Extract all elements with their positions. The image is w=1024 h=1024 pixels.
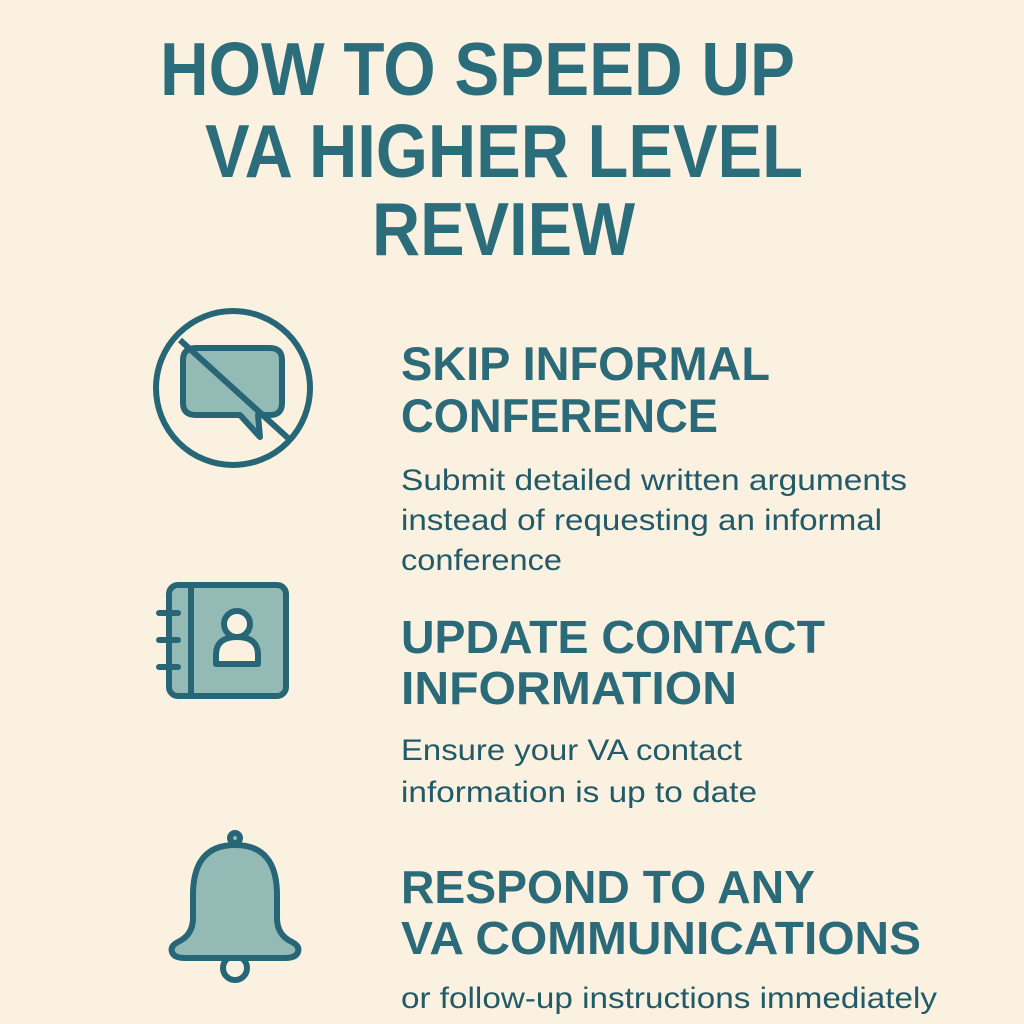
- icon: bell: [172, 833, 298, 980]
- heading: update contact information: INFORMATION: [401, 662, 737, 714]
- text: skip informal description: instead of requesting an informal: [401, 504, 882, 537]
- heading: skip informal conference: CONFERENCE: [401, 389, 718, 442]
- text: update contact description: Ensure your VA contact: [401, 734, 743, 767]
- text: skip informal description: [401, 464, 907, 577]
- text: respond description: or follow-up instructions immediately: [401, 982, 937, 1015]
- title: [160, 27, 803, 271]
- text: update contact description: information is up to date: [401, 776, 757, 809]
- text: skip informal description: Submit detailed written arguments: [401, 464, 907, 497]
- heading: respond to communications: VA COMMUNICATIONS: [401, 912, 921, 964]
- heading: respond to communications: [401, 861, 921, 964]
- heading: update contact information: [401, 611, 825, 714]
- title: VA HIGHER LEVEL: [205, 109, 803, 193]
- text: skip informal description: conference: [401, 544, 562, 577]
- heading: respond to communications: RESPOND TO ANY: [401, 861, 815, 913]
- icon: contact book: [159, 585, 286, 696]
- heading: skip informal conference: SKIP INFORMAL: [401, 337, 770, 390]
- title: HOW TO SPEED UP: [160, 27, 795, 111]
- icon: no speech bubble: [156, 311, 310, 465]
- text: update contact description: [401, 734, 757, 809]
- heading: update contact information: UPDATE CONTACT: [401, 611, 825, 663]
- heading: skip informal conference: [401, 337, 770, 442]
- title: REVIEW: [372, 187, 635, 271]
